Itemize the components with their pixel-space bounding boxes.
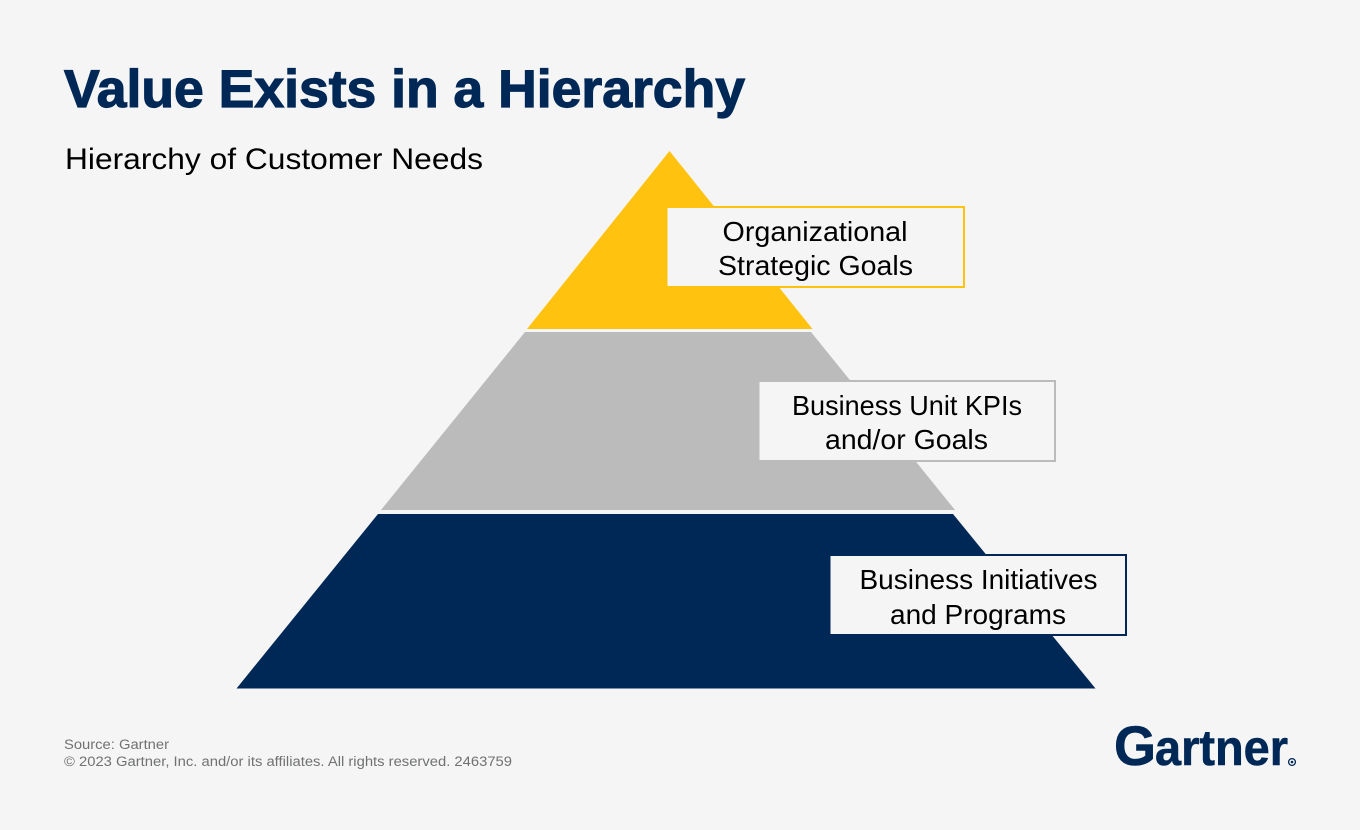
- callout: Business Initiatives and Programs: and Programs: [890, 599, 1066, 630]
- logo: Gartner: artner: [1155, 720, 1288, 776]
- callout: Organizational Strategic Goals: Strategic Goals: [718, 250, 913, 281]
- pyramid: [236, 151, 1096, 688]
- callout: Business Unit KPIs and/or Goals: Business Unit KPIs: [792, 390, 1022, 421]
- pyramid tier: top yellow: [527, 151, 812, 329]
- callout: Organizational Strategic Goals: Organizational: [722, 216, 908, 247]
- source note: [64, 737, 512, 769]
- callout: Organizational Strategic Goals: [668, 207, 964, 287]
- logo: Gartner: G: [1114, 714, 1156, 777]
- title: Value Exists in a Hierarchy: [64, 60, 746, 119]
- callout: Business Initiatives and Programs: Business Initiatives: [860, 564, 1098, 595]
- callout: Business Unit KPIs and/or Goals: and/or Goals: [825, 424, 988, 455]
- callout: Business Unit KPIs and/or Goals: [760, 381, 1055, 461]
- source note: Source: Gartner: [64, 737, 170, 752]
- callout: Business Initiatives and Programs: [830, 555, 1126, 635]
- subtitle: Hierarchy of Customer Needs: [65, 143, 483, 176]
- source note: © 2023 Gartner, Inc. and/or its affiliates. All rights reserved. 2463759: [64, 754, 512, 769]
- logo: Gartner: [1114, 714, 1295, 777]
- pyramid tier: bottom navy: [236, 514, 1096, 688]
- pyramid tier: middle gray: [381, 332, 955, 510]
